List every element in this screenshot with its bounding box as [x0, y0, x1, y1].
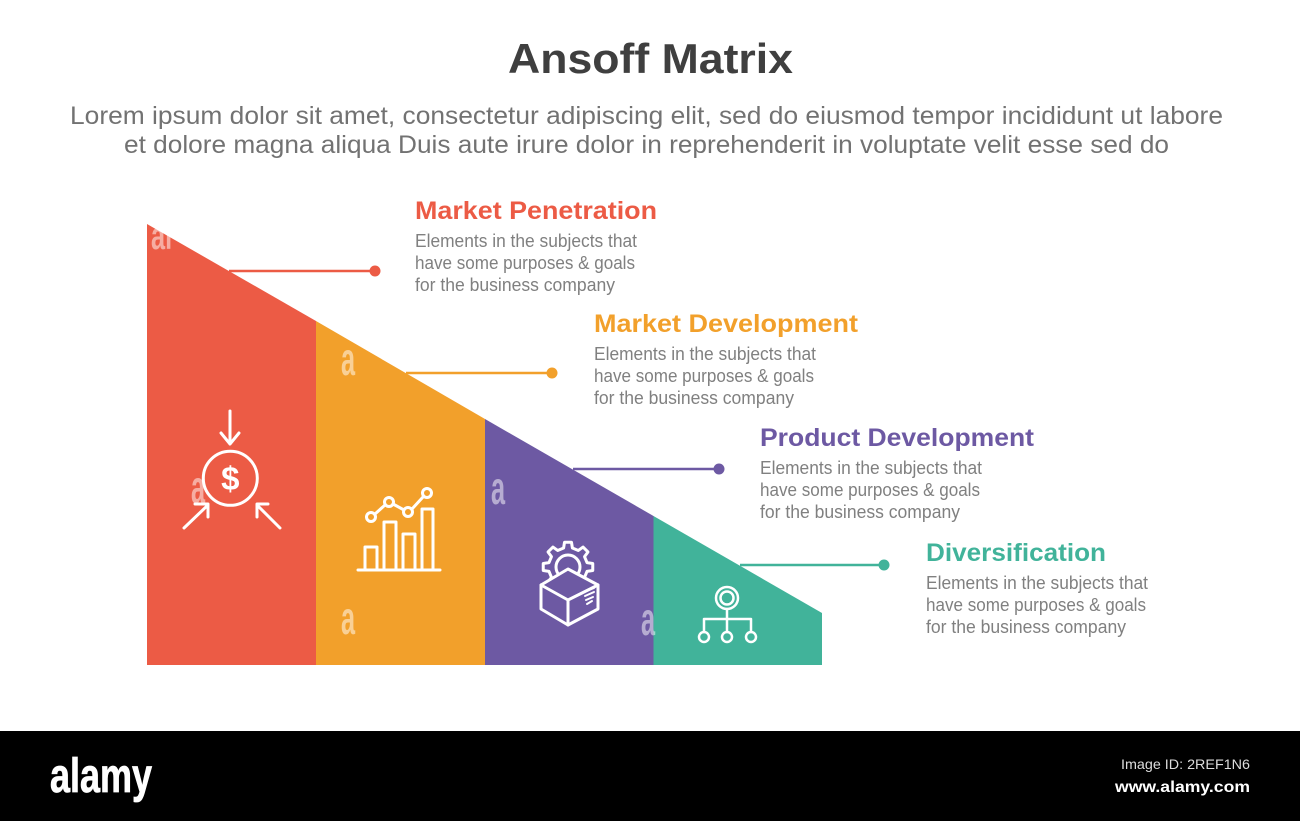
intro paragraph: Lorem ipsum dolor sit amet, consectetur adipiscing elit, sed do eiusmod tempor incididunt ut labore: [70, 102, 1223, 130]
segment: product development: [485, 419, 654, 665]
image id: Image ID: 2REF1N6: [1121, 756, 1250, 772]
text block: diversification: Elements in the subjects that: [926, 573, 1148, 593]
text block: product development: have some purposes & goals: [760, 480, 980, 500]
icon: gear and box: [541, 542, 598, 625]
descending triangle chart: [147, 224, 822, 665]
text block: market development: Elements in the subjects that: [594, 344, 816, 364]
website: www.alamy.com: [1114, 779, 1250, 796]
text block: market development: have some purposes & goals: [594, 366, 814, 386]
text block: diversification: [926, 539, 1148, 637]
watermark letters: a: [641, 593, 655, 645]
title: Ansoff Matrix: [508, 35, 794, 82]
watermark letters: al: [151, 213, 172, 257]
text block: diversification: for the business company: [926, 617, 1126, 637]
text block: market penetration: Market Penetration: [415, 197, 657, 225]
text block: market penetration: for the business company: [415, 275, 615, 295]
connector: diversification: [740, 560, 890, 570]
alamy logo: alamy: [50, 750, 152, 803]
text block: product development: Elements in the subjects that: [760, 458, 982, 478]
watermark letters: [151, 213, 655, 645]
text block: diversification: have some purposes & goals: [926, 595, 1146, 615]
text block: product development: [760, 424, 1035, 522]
connector: market penetration: [229, 266, 380, 276]
intro paragraph: et dolore magna aliqua Duis aute irure dolor in reprehenderit in voluptate velit esse sed do: [124, 131, 1169, 159]
connector: market development: [406, 368, 558, 378]
watermark letters: a: [491, 462, 505, 514]
watermark letters: a: [191, 461, 205, 513]
text block: market development: [594, 310, 859, 408]
text block: market development: for the business company: [594, 388, 794, 408]
segment: market penetration: [147, 224, 316, 665]
connector: product development: [573, 464, 724, 474]
segment: diversification: [654, 516, 822, 665]
text block: market penetration: [415, 197, 657, 295]
text block: market penetration: have some purposes & goals: [415, 253, 635, 273]
segment: market development: [316, 321, 485, 665]
text block: diversification: Diversification: [926, 539, 1106, 567]
text block: market development: Market Development: [594, 310, 859, 338]
text block: product development: Product Development: [760, 424, 1035, 452]
watermark letters: a: [341, 333, 355, 385]
icon: hierarchy network: [699, 587, 756, 642]
icon: dollar with inward arrows: [184, 411, 280, 528]
icon: growth bar chart: [358, 488, 440, 570]
watermark letters: a: [341, 592, 355, 644]
intro paragraph: [70, 102, 1223, 159]
text block: market penetration: Elements in the subjects that: [415, 231, 637, 251]
icon: dollar with inward arrows: $: [221, 460, 239, 497]
footer bar: [0, 731, 1300, 821]
text block: product development: for the business company: [760, 502, 960, 522]
